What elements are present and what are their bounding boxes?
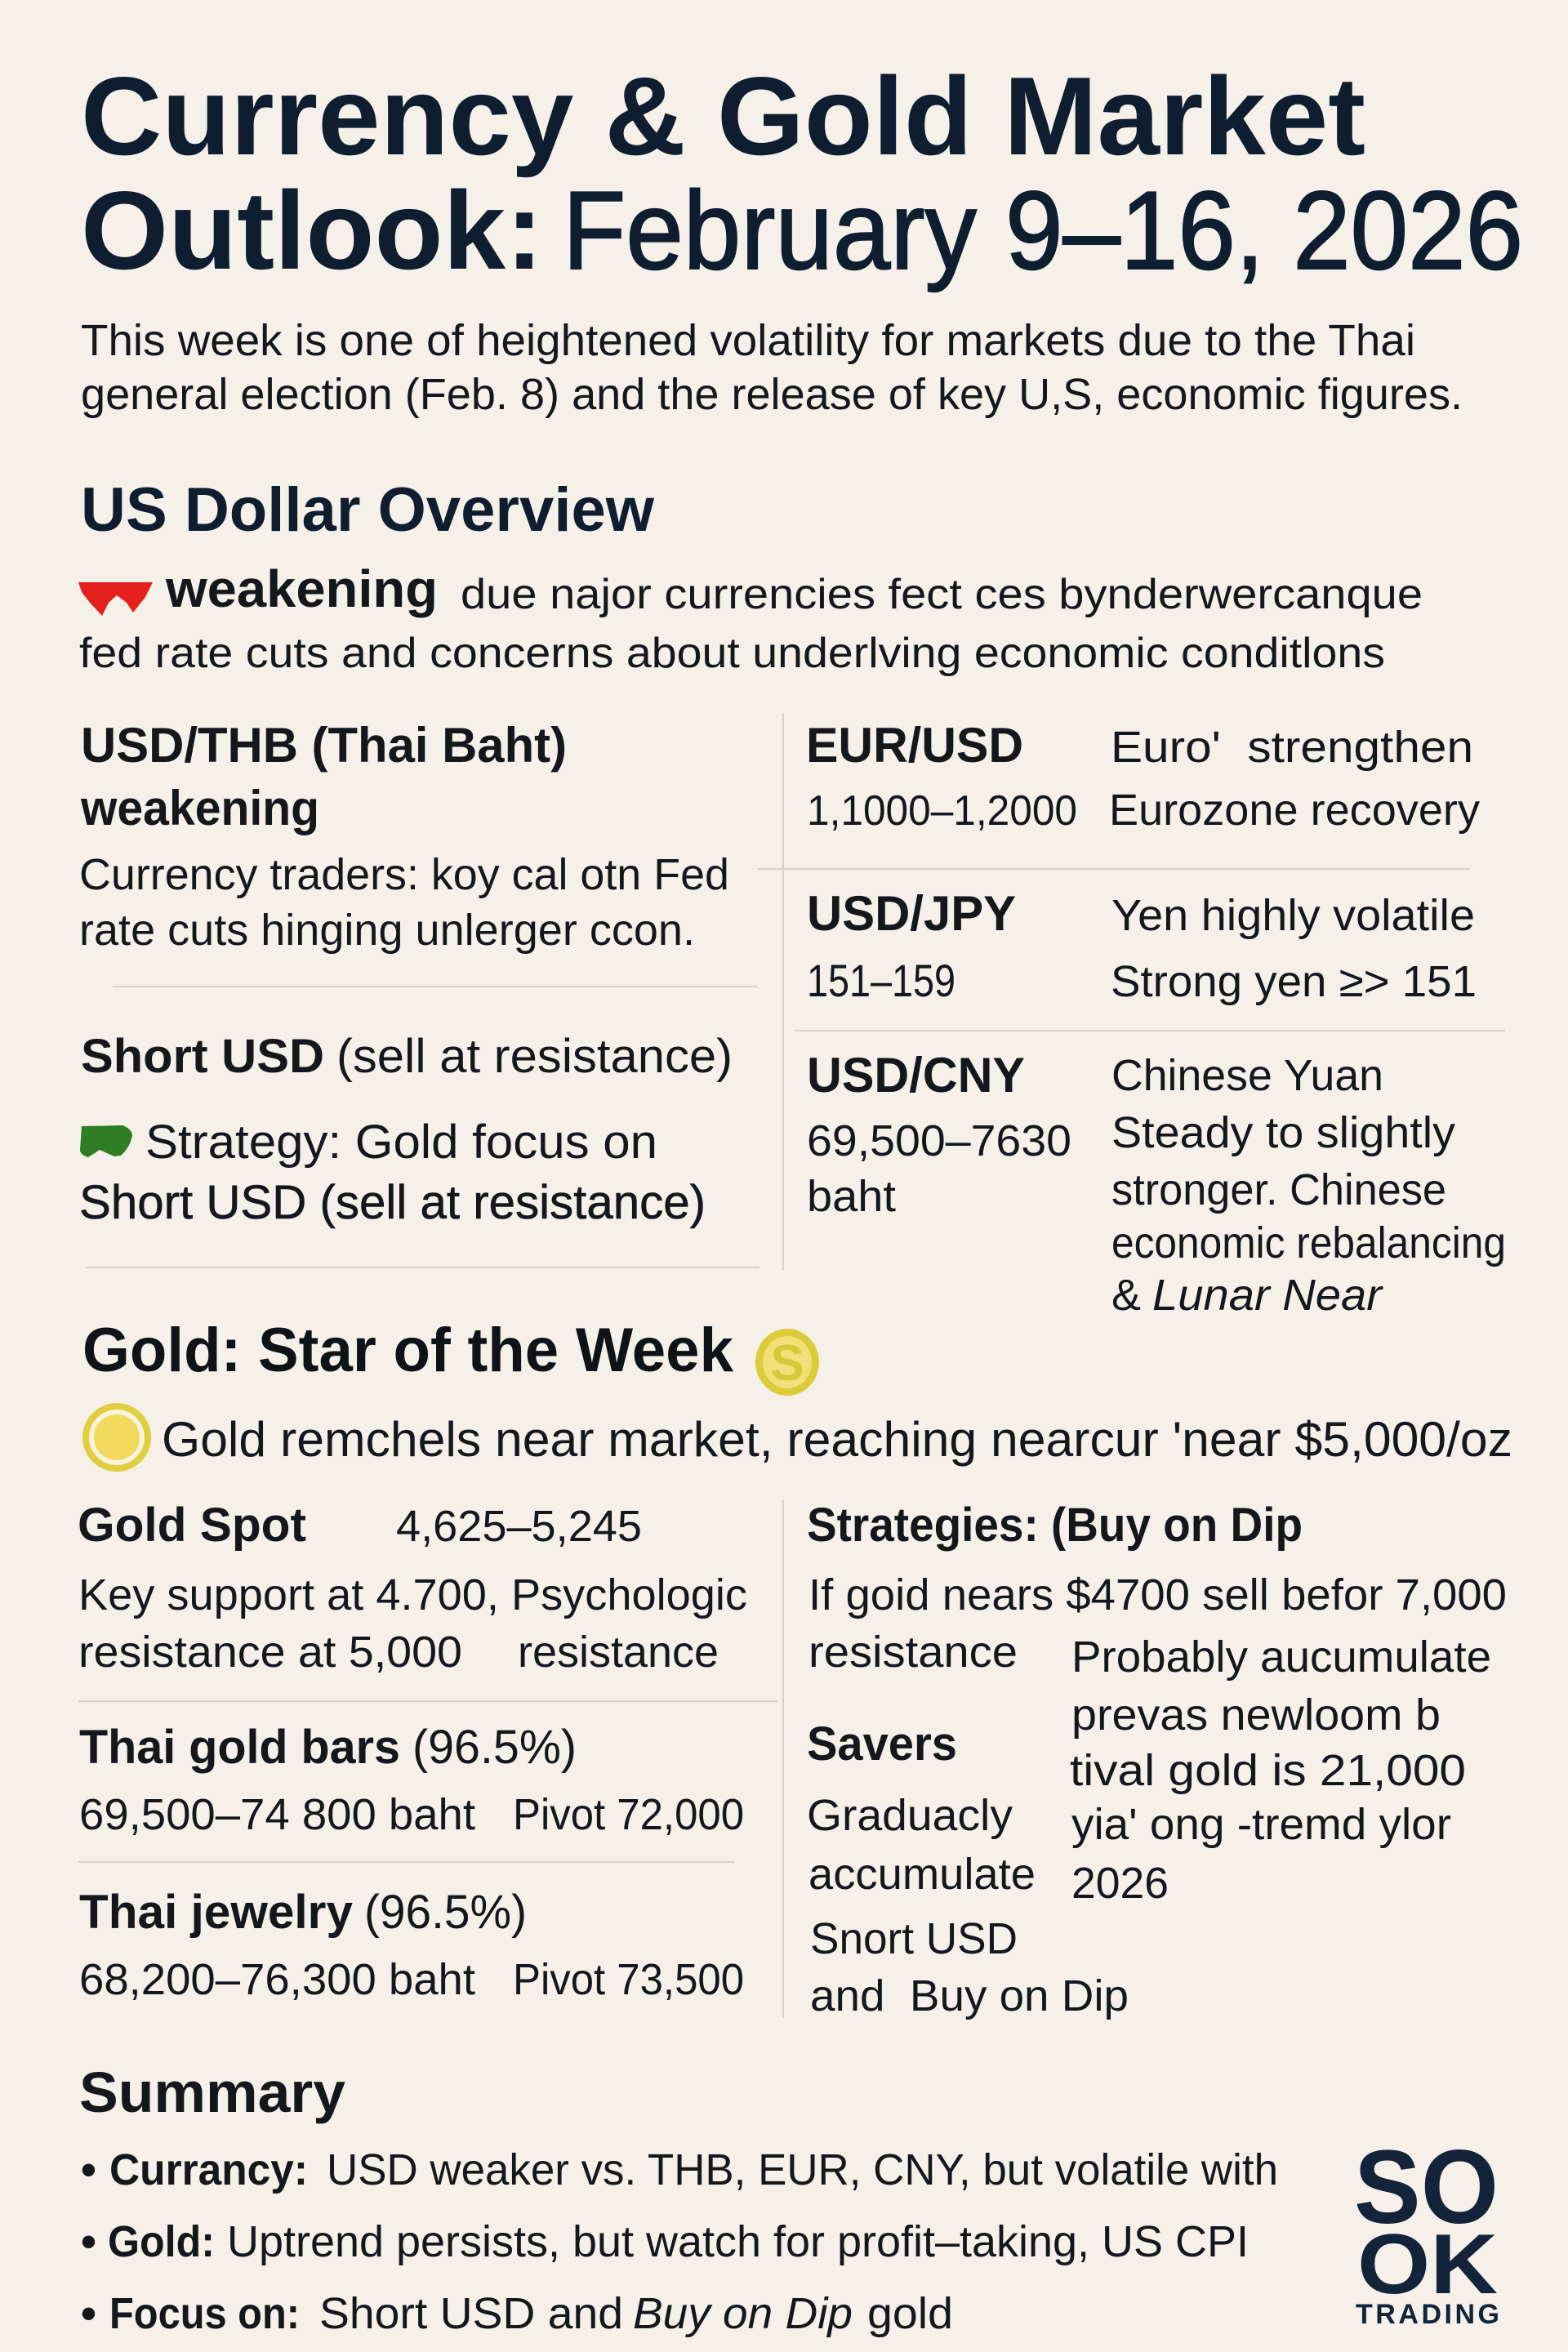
intro text bbox=[81, 316, 1463, 419]
panel: gold spot: Gold Spot bbox=[78, 1499, 306, 1552]
logo: SOOK Trading: SO bbox=[1354, 2129, 1499, 2246]
panel: EUR/USD: EUR/USD bbox=[806, 718, 1023, 773]
heading: US Dollar Overview: US Dollar Overview bbox=[81, 475, 655, 545]
bullet: gold: Uptrend persists, but watch for profit–taking, US CPI bbox=[227, 2217, 1249, 2266]
panel: EUR/USD bbox=[806, 718, 1480, 835]
USD/THB description: rate cuts hinging unlerger ccon. bbox=[79, 906, 695, 955]
panel: USD/THB bbox=[79, 718, 760, 1267]
panel: Thai gold bars: Thai gold bars bbox=[79, 1721, 400, 1774]
bullet: focus: gold bbox=[867, 2289, 953, 2338]
logo: SOOK Trading: TRADING bbox=[1356, 2299, 1499, 2330]
panel: Thai jewelry: Pivot 73,500 bbox=[513, 1955, 744, 2004]
panel: USD/CNY: Chinese Yuan bbox=[1111, 1051, 1383, 1100]
bullet: currency: Currancy: bbox=[109, 2145, 308, 2194]
panel: Thai gold bars: (96.5%) bbox=[412, 1721, 577, 1774]
Short USD recommendation: (sell at resistance) bbox=[336, 1030, 733, 1083]
panel: Thai jewelry bbox=[79, 1886, 744, 2004]
panel: gold spot: resistance at 5,000 bbox=[78, 1628, 462, 1677]
bullet: focus: Buy on Dip bbox=[633, 2289, 853, 2338]
bullet: gold: • bbox=[81, 2217, 96, 2266]
panel: Thai jewelry: Thai jewelry bbox=[79, 1886, 353, 1939]
dollar weakening summary: fed rate cuts and concerns about underlving economic conditlons bbox=[79, 630, 1385, 677]
panel: EUR/USD: 1,1000–1,2000 bbox=[807, 787, 1077, 835]
title: Outlook: bbox=[81, 168, 543, 292]
USD/THB description: Currency traders: koy cal otn Fed bbox=[79, 850, 729, 899]
logo: SOOK Trading bbox=[1354, 2129, 1499, 2330]
panel: savers: accumulate bbox=[808, 1850, 1036, 1899]
panel: strategies: If goid nears $4700 sell befor 7,000 bbox=[808, 1570, 1507, 1619]
panel: USD/CNY: 69,500–7630 bbox=[807, 1116, 1071, 1165]
bullet: focus bbox=[81, 2289, 953, 2338]
heading: Summary: Summary bbox=[79, 2060, 345, 2124]
panel: strategies: prevas newloom b bbox=[1071, 1690, 1441, 1740]
Short USD recommendation: Short USD bbox=[81, 1030, 324, 1083]
logo: SOOK Trading: OK bbox=[1357, 2217, 1498, 2312]
strategy text: Short USD (sell at resistance) bbox=[79, 1176, 706, 1229]
panel: gold spot: 4,625–5,245 bbox=[396, 1502, 642, 1551]
dollar weakening summary: due najor currencies fect ces bynderwercanque bbox=[461, 571, 1423, 618]
icon: red weakening arrow bbox=[78, 582, 153, 616]
header bbox=[81, 54, 1523, 419]
intro text: This week is one of heightened volatility for markets due to the Thai bbox=[81, 316, 1415, 365]
panel: USD/JPY: Yen highly volatile bbox=[1111, 891, 1475, 940]
panel: strategies: resistance bbox=[808, 1628, 1018, 1677]
section: US Dollar overview bbox=[78, 475, 1506, 1320]
bullet: focus: Focus on: bbox=[109, 2289, 300, 2338]
panel: savers: Savers bbox=[807, 1717, 957, 1771]
icon: gold disc bbox=[82, 1403, 151, 1472]
section: Gold bbox=[78, 1316, 1512, 2020]
panel: gold spot: Key support at 4.700, Psychologic bbox=[78, 1570, 747, 1619]
USD/THB description bbox=[79, 850, 729, 955]
panel: strategies: 2026 bbox=[1071, 1859, 1169, 1908]
panel: USD/JPY: USD/JPY bbox=[807, 886, 1016, 941]
panel: USD/CNY: economic rebalancing bbox=[1111, 1218, 1506, 1267]
panel: USD/CNY: baht bbox=[807, 1172, 896, 1221]
panel: savers bbox=[807, 1717, 1129, 2020]
title: Currency & Gold Market bbox=[81, 54, 1365, 178]
panel: USD/JPY: 151–159 bbox=[807, 955, 956, 1006]
panel: USD/CNY: Steady to slightly bbox=[1111, 1108, 1455, 1157]
panel: USD/CNY: & bbox=[1111, 1271, 1141, 1320]
panel: strategies: Probably aucumulate bbox=[1071, 1633, 1491, 1682]
panel: USD/CNY: USD/CNY bbox=[807, 1048, 1025, 1102]
heading: Gold: Star of the Week: Gold: Star of the Week bbox=[82, 1316, 734, 1385]
icon: gold coin: S bbox=[770, 1335, 804, 1392]
bullet: focus: • bbox=[81, 2289, 96, 2338]
panel: gold spot bbox=[78, 1499, 747, 1677]
title: February 9–16, 2026 bbox=[563, 168, 1523, 292]
panel: savers: Graduacly bbox=[807, 1791, 1013, 1840]
dollar weakening summary bbox=[79, 559, 1423, 677]
bullet: currency: USD weaker vs. THB, EUR, CNY, but volatile with bbox=[327, 2145, 1278, 2194]
panel: savers: Snort USD bbox=[810, 1914, 1018, 1963]
panel: USD/JPY: Strong yen ≥> 151 bbox=[1111, 957, 1477, 1006]
section: summary bbox=[79, 2060, 1278, 2338]
bullet: currency: • bbox=[81, 2145, 96, 2194]
panel: strategies: tival gold is 21,000 bbox=[1070, 1746, 1466, 1795]
panel: USD/CNY bbox=[807, 1048, 1506, 1320]
title bbox=[81, 54, 1523, 292]
panel: Thai gold bars bbox=[79, 1721, 744, 1839]
USD/THB status: weakening bbox=[80, 781, 319, 835]
panel: EUR/USD: Euro' strengthen bbox=[1111, 723, 1473, 772]
panel: Thai jewelry: 68,200–76,300 baht bbox=[79, 1955, 475, 2004]
panel: USD/CNY: Lunar Near bbox=[1152, 1271, 1383, 1320]
intro text: general election (Feb. 8) and the release of key U,S, economic figures. bbox=[81, 370, 1463, 419]
bullet: gold: Gold: bbox=[108, 2217, 215, 2266]
gold summary line: Gold remchels near market, reaching nearcur 'near $5,000/oz bbox=[162, 1412, 1512, 1467]
panel: USD/JPY bbox=[807, 886, 1477, 1006]
panel: Thai gold bars: Pivot 72,000 bbox=[513, 1790, 744, 1839]
bullet: focus: Short USD and bbox=[319, 2289, 623, 2338]
panel: strategies: yia' ong -tremd ylor bbox=[1071, 1800, 1451, 1849]
panel: savers: and Buy on Dip bbox=[810, 1971, 1129, 2020]
panel: gold spot: resistance bbox=[518, 1628, 719, 1677]
USD/THB heading: USD/THB (Thai Baht) bbox=[81, 718, 567, 773]
panel: Thai jewelry: (96.5%) bbox=[364, 1886, 527, 1939]
panel: strategies: Strategies: (Buy on Dip bbox=[807, 1499, 1303, 1552]
panel: strategies bbox=[807, 1499, 1507, 1908]
panel: USD/CNY: stronger. Chinese bbox=[1111, 1165, 1446, 1214]
icon: green strategy marker bbox=[80, 1125, 132, 1157]
panel: EUR/USD: Eurozone recovery bbox=[1109, 786, 1480, 835]
panel: Thai gold bars: 69,500–74 800 baht bbox=[79, 1790, 475, 1839]
dollar weakening summary: weakening bbox=[165, 559, 438, 618]
Short USD recommendation bbox=[81, 1030, 733, 1083]
icon: gold coin bbox=[755, 1329, 819, 1396]
strategy text: Strategy: Gold focus on bbox=[145, 1116, 657, 1169]
strategy text bbox=[79, 1116, 706, 1229]
